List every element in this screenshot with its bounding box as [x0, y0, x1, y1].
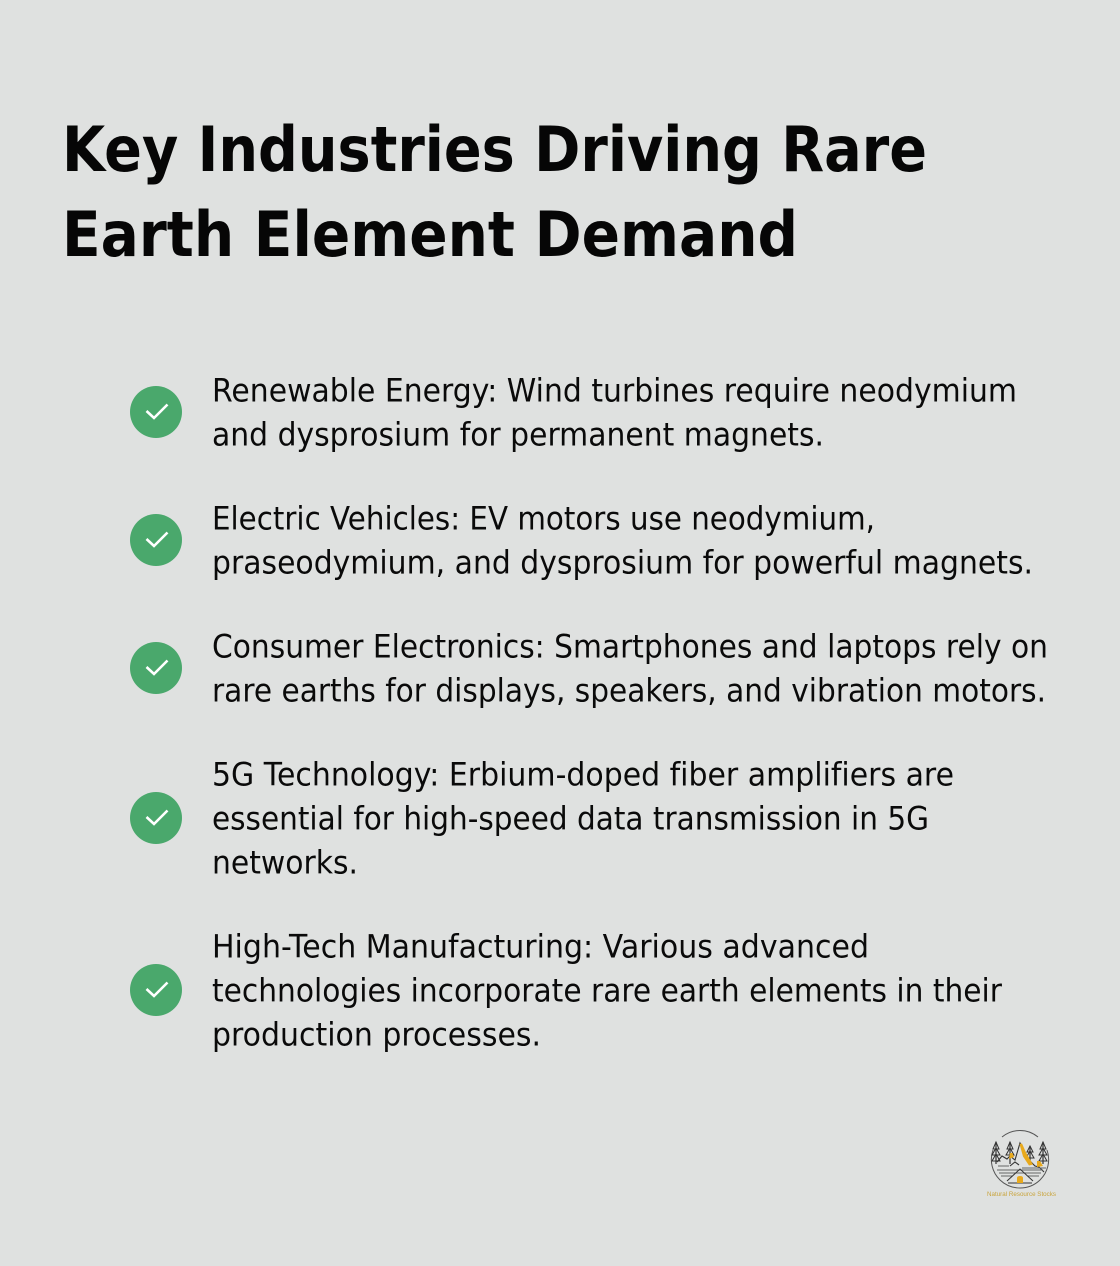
- text: 5G technology: 5G Technology: Erbium-doped fiber amplifiers are: [212, 756, 954, 794]
- text: consumer electronics: [212, 628, 1048, 710]
- text: electric vehicles: [212, 500, 1033, 582]
- title: [62, 113, 927, 271]
- text: high-tech manufacturing: High-Tech Manufacturing: Various advanced: [212, 928, 869, 966]
- text: 5G technology: networks.: [212, 844, 358, 882]
- text: 5G technology: [212, 756, 954, 882]
- icon: check mark: [130, 514, 182, 566]
- list item: consumer electronics: [130, 628, 1048, 710]
- title: Key Industries Driving Rare: [62, 113, 927, 186]
- text: 5G technology: essential for high-speed data transmission in 5G: [212, 800, 929, 838]
- text: high-tech manufacturing: production processes.: [212, 1016, 541, 1054]
- text: electric vehicles: Electric Vehicles: EV motors use neodymium,: [212, 500, 875, 538]
- text: consumer electronics: rare earths for displays, speakers, and vibration motors.: [212, 672, 1046, 710]
- logo: Natural Resource Stocks: [987, 1130, 1057, 1198]
- icon: check mark: [130, 386, 182, 438]
- text: renewable energy: Renewable Energy: Wind turbines require neodymium: [212, 372, 1017, 410]
- text: electric vehicles: praseodymium, and dysprosium for powerful magnets.: [212, 544, 1033, 582]
- text: renewable energy: [212, 372, 1017, 454]
- list item: 5G technology: [130, 756, 954, 882]
- icon: check mark: [130, 642, 182, 694]
- text: high-tech manufacturing: technologies incorporate rare earth elements in their: [212, 972, 1003, 1010]
- text: consumer electronics: Consumer Electronics: Smartphones and laptops rely on: [212, 628, 1048, 666]
- text: high-tech manufacturing: [212, 928, 1003, 1054]
- list item: electric vehicles: [130, 500, 1033, 582]
- list item: high-tech manufacturing: [130, 928, 1003, 1054]
- text: renewable energy: and dysprosium for permanent magnets.: [212, 416, 824, 454]
- logo: Natural Resource Stocks: Natural Resource Stocks: [987, 1191, 1057, 1198]
- title: Earth Element Demand: [62, 198, 798, 271]
- icon: check mark: [130, 792, 182, 844]
- icon: check mark: [130, 964, 182, 1016]
- list item: renewable energy: [130, 372, 1017, 454]
